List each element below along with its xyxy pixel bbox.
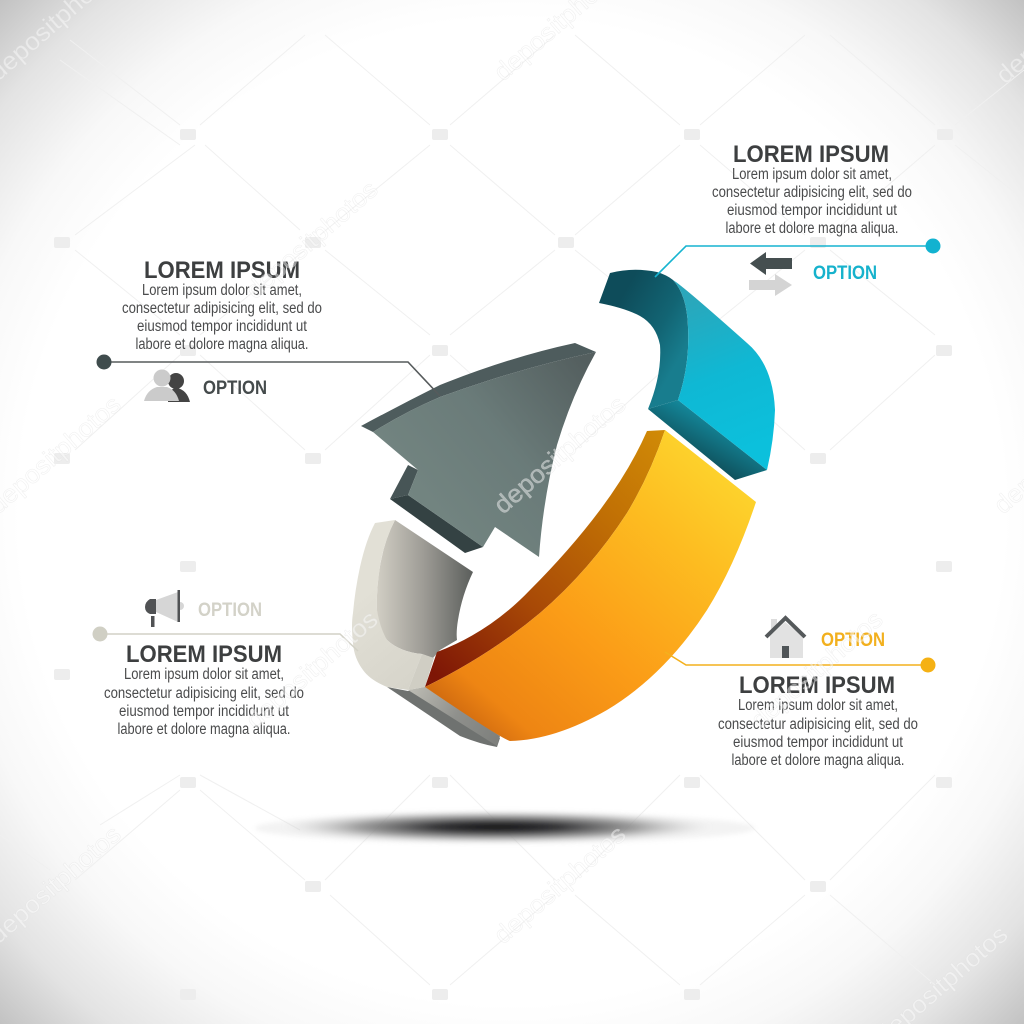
text block: Lorem ipsum dolor sit amet, (738, 697, 898, 714)
text block: consectetur adipisicing elit, sed do (122, 300, 322, 317)
stock watermarks: depositphotos (746, 605, 888, 735)
heading: LOREM IPSUM (126, 641, 282, 668)
text block: consectetur adipisicing elit, sed do (718, 716, 918, 733)
text block: labore et dolore magna aliqua. (136, 336, 308, 353)
stock watermarks: depositphotos (489, 390, 631, 520)
callout: left (96, 257, 440, 402)
text block (122, 282, 322, 353)
callout: bottom right (665, 618, 936, 769)
stock watermarks: depositphotos (241, 175, 383, 305)
option label: dark: OPTION (203, 378, 267, 399)
text block: Lorem ipsum dolor sit amet, (124, 666, 284, 683)
text block (712, 166, 912, 237)
callout: top right (655, 141, 940, 296)
text block: Lorem ipsum dolor sit amet, (732, 166, 892, 183)
callout: bottom left (92, 590, 358, 738)
text block: eiusmod tempor incididunt ut (119, 703, 290, 720)
ground shadow (255, 811, 755, 843)
icon: house (766, 618, 805, 658)
option label: beige: OPTION (198, 600, 262, 621)
text block (718, 697, 918, 769)
orange arrow segment (425, 430, 756, 741)
text block: labore et dolore magna aliqua. (732, 752, 904, 769)
text block: labore et dolore magna aliqua. (118, 721, 290, 738)
option label: teal: OPTION (813, 263, 877, 284)
text block (104, 666, 304, 738)
text block: eiusmod tempor incididunt ut (727, 202, 898, 219)
icon: people (144, 370, 190, 402)
text block: eiusmod tempor incididunt ut (137, 318, 308, 335)
text block: eiusmod tempor incididunt ut (733, 734, 904, 751)
stock watermarks: depositphotos (241, 605, 383, 735)
stock camera marks (54, 129, 953, 1000)
text block: labore et dolore magna aliqua. (726, 220, 898, 237)
text block: Lorem ipsum dolor sit amet, (142, 282, 302, 299)
stock watermarks: depositphotos (489, 820, 631, 950)
option label: yellow: OPTION (821, 630, 885, 651)
beige arrow segment (352, 520, 500, 747)
heading: LOREM IPSUM (733, 141, 889, 168)
text block: consectetur adipisicing elit, sed do (104, 685, 304, 702)
grey arrow head segment (361, 343, 596, 557)
heading: LOREM IPSUM (739, 672, 895, 699)
icon: megaphone (145, 590, 184, 627)
heading: LOREM IPSUM (144, 257, 300, 284)
icon: exchange arrows (749, 252, 792, 296)
text block: consectetur adipisicing elit, sed do (712, 184, 912, 201)
teal arrow segment (599, 270, 775, 480)
